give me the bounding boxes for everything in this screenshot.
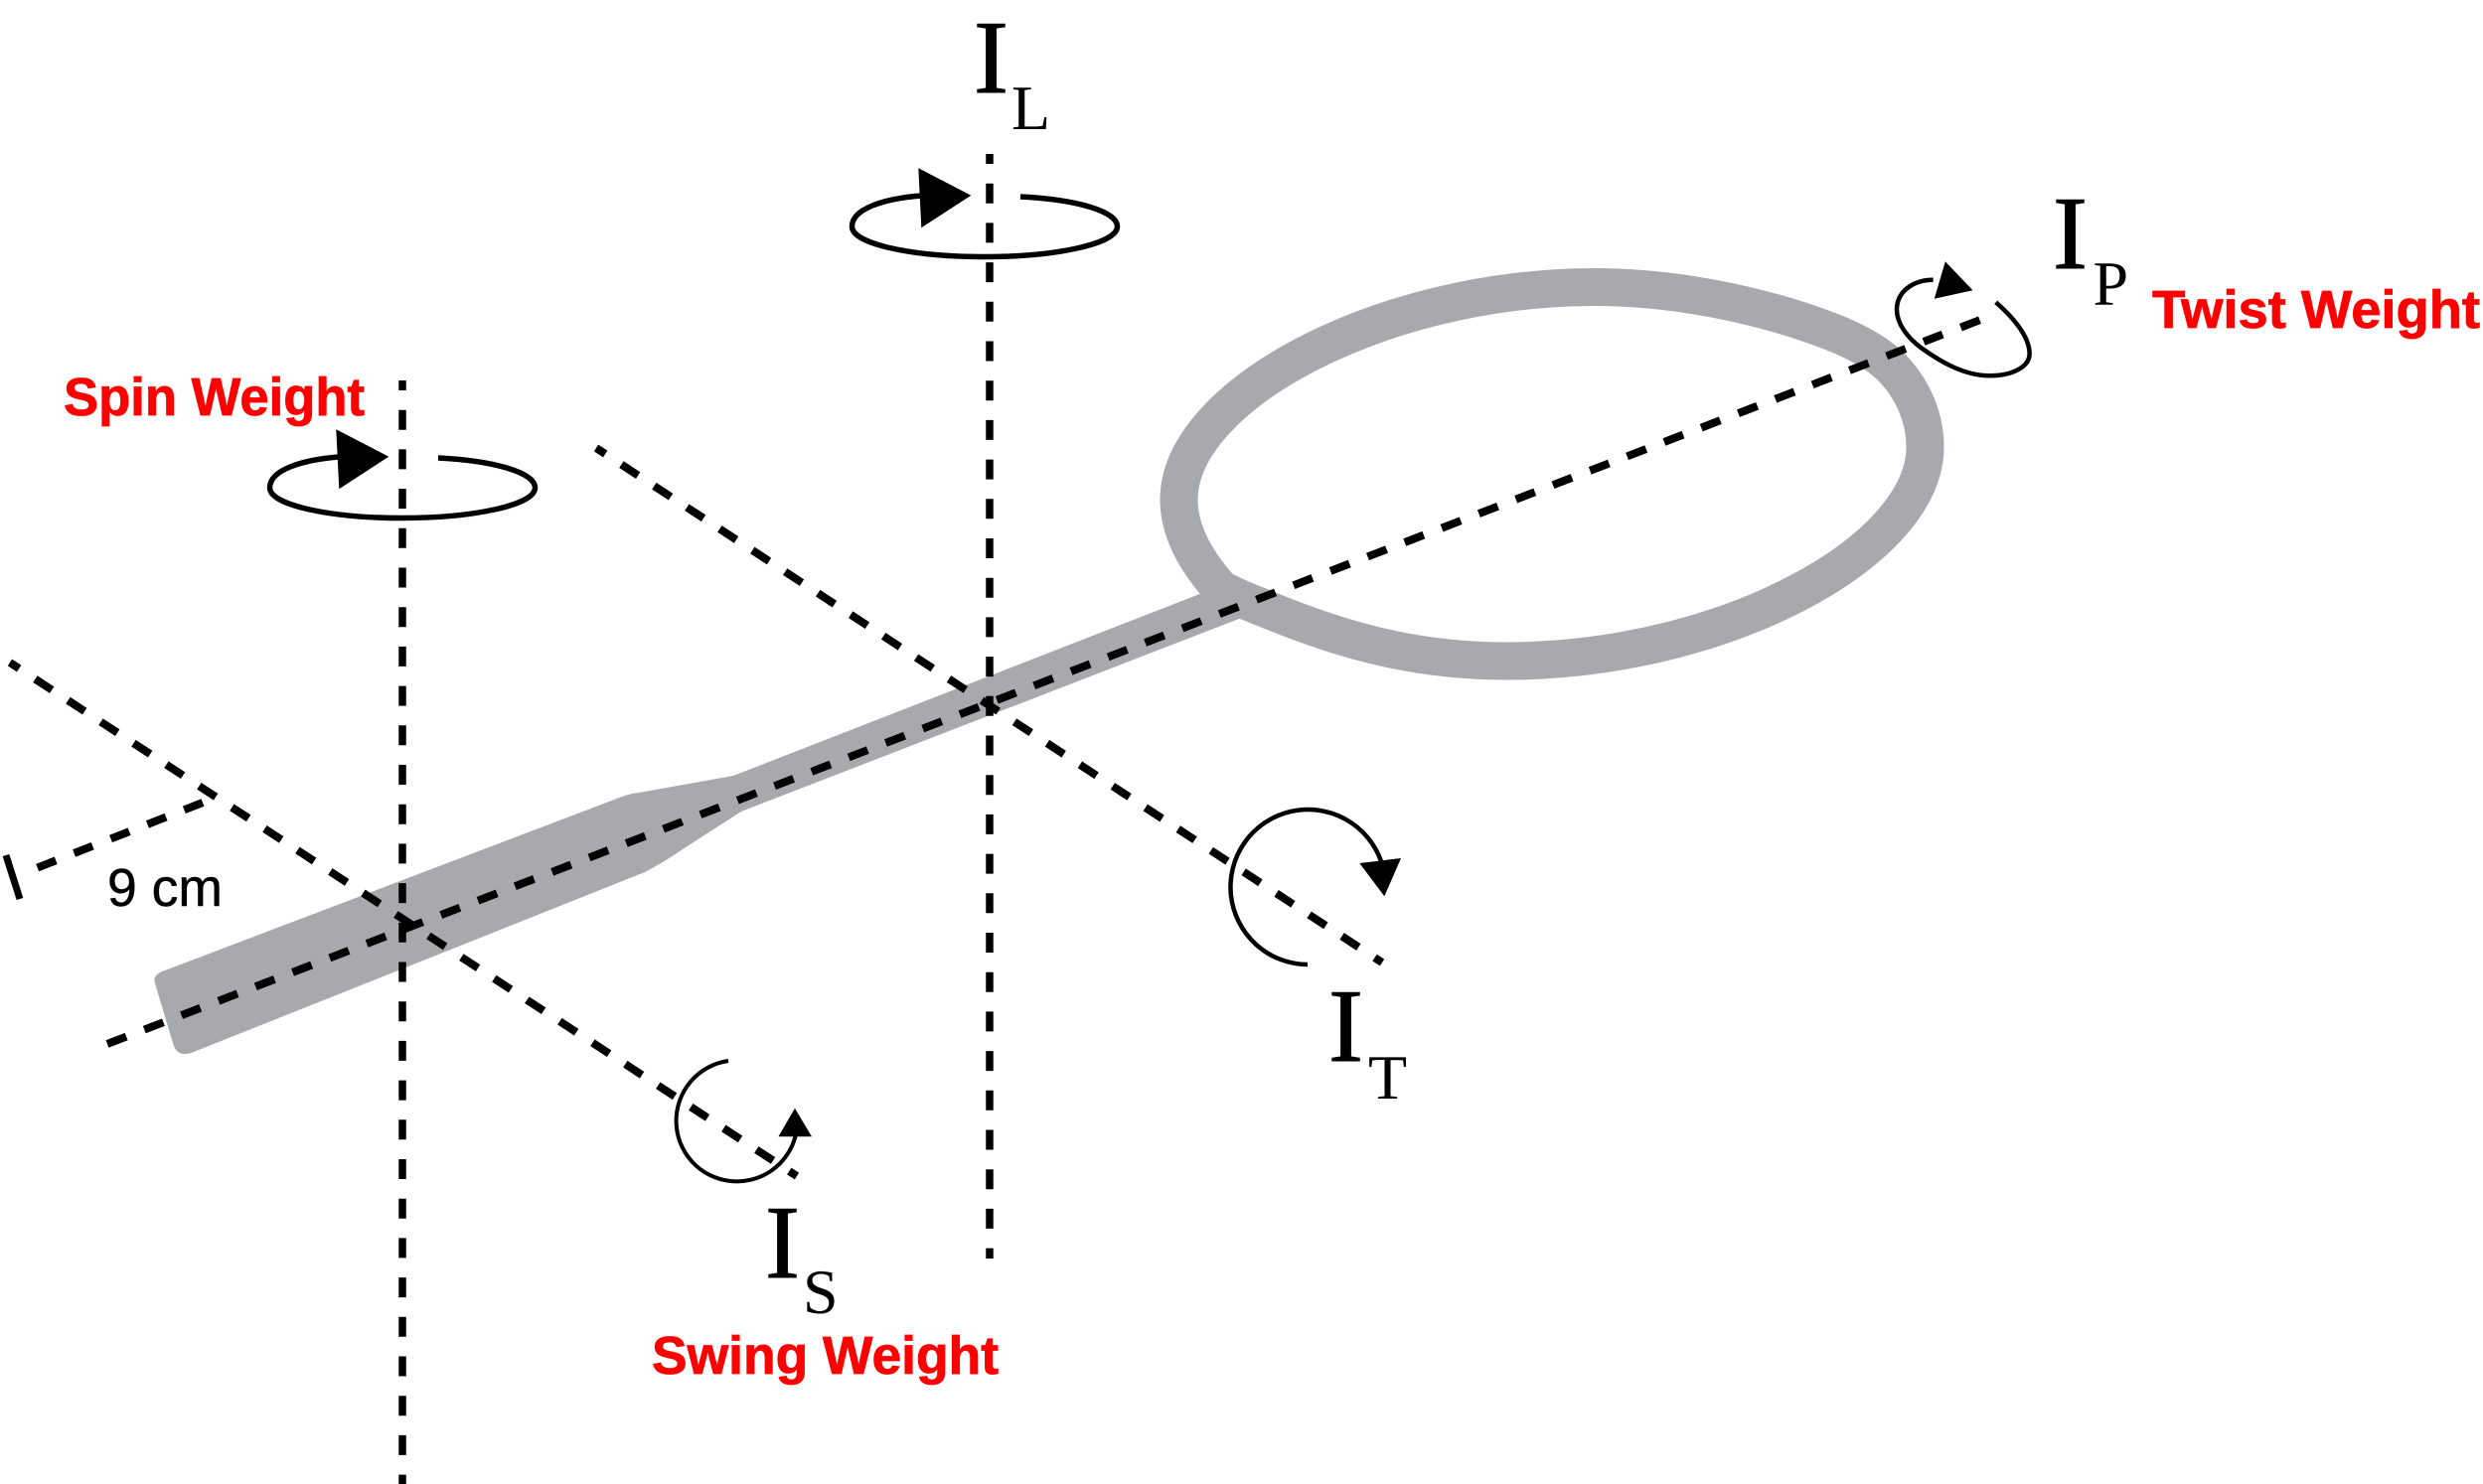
dimension: 9 cm: 9 cm (107, 858, 223, 918)
label: Twist Weight: Twist Weight (2152, 280, 2480, 340)
label: Spin Weight: Spin Weight (64, 368, 365, 427)
label: I P: P (2093, 248, 2128, 319)
label: Swing Weight: Swing Weight (652, 1326, 999, 1386)
label: I L: I (974, 0, 1009, 115)
axis: transverse diagonal (596, 448, 1382, 963)
icon: rotation arrow around swing axis (677, 1061, 812, 1181)
label: I T (1328, 967, 1407, 1113)
axis: swing weight diagonal (10, 663, 797, 1176)
icon: rotation arrow around spin axis (270, 429, 535, 519)
label: I S: I (765, 1184, 800, 1300)
label: I S: S (803, 1257, 839, 1327)
racket (154, 287, 1926, 1054)
dimension: 9 cm (6, 803, 223, 918)
label: I S (765, 1184, 839, 1327)
label: I T: I (1328, 967, 1363, 1084)
label: I P: I (2053, 175, 2088, 291)
axis: spin weight vertical (398, 380, 406, 1484)
label: I T: T (1368, 1042, 1407, 1113)
racket head ring (1178, 287, 1926, 662)
racket shaft and handle (154, 578, 1240, 1054)
icon: rotation arrow around longitudinal axis (853, 168, 1117, 256)
label: I P (2053, 175, 2128, 319)
label: I L: L (1011, 73, 1050, 143)
icon: rotation arrow around transverse axis (1230, 810, 1401, 965)
axis: longitudinal vertical (986, 154, 994, 1259)
label: I L (974, 0, 1050, 143)
icon: rotation arrow around twist axis (1897, 261, 2030, 375)
axis: twist weight along racket (107, 320, 1980, 1044)
